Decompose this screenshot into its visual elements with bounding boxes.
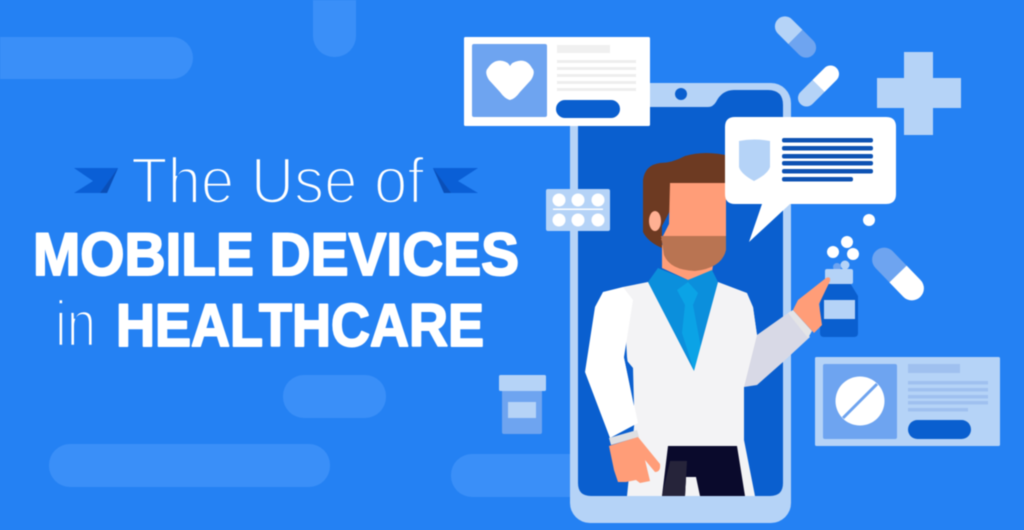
doctor: shirt — [648, 268, 718, 371]
doctor: ear — [649, 211, 661, 231]
doctor: coat — [623, 282, 757, 496]
button — [908, 420, 971, 439]
icon: capsule right — [867, 243, 929, 305]
doctor: neck — [662, 245, 716, 280]
doctor: raised arm — [744, 300, 810, 387]
icon: pill blister — [546, 189, 610, 231]
doctor: lowered hand — [609, 437, 660, 483]
icon: shield — [739, 140, 770, 181]
button — [556, 100, 620, 118]
doctor: left cuff — [609, 430, 639, 445]
icon: medicine jar — [499, 375, 546, 434]
card: heart — [464, 37, 650, 126]
icon: round tablet — [836, 376, 884, 426]
doctor: trouser shade — [662, 461, 687, 496]
doctor: face — [661, 183, 726, 240]
ribbon: left — [74, 168, 118, 193]
icon: capsule top — [771, 12, 820, 62]
doctor: tie — [677, 282, 702, 371]
doctor: trousers — [662, 446, 745, 496]
icon: medical cross — [877, 52, 961, 135]
icon: medicine bottle — [820, 260, 858, 337]
doctor: left sleeve — [585, 287, 638, 438]
doctor: pointing hand — [793, 277, 830, 333]
doctor — [585, 153, 810, 496]
icon: heart — [486, 61, 534, 100]
heading: HEALTHCARE: HEALTHCARE — [116, 292, 484, 359]
speech bubble — [725, 117, 896, 242]
heading: The Use of: The Use of — [131, 144, 425, 217]
title — [33, 144, 519, 360]
heading: in: in — [55, 287, 96, 360]
doctor: hair — [643, 153, 730, 248]
card: pill — [815, 357, 1000, 446]
heading: MOBILE DEVICES: MOBILE DEVICES — [33, 221, 519, 288]
ribbon: right — [433, 168, 478, 193]
doctor: raised arm cuff — [788, 310, 812, 338]
icon: floating pills — [827, 214, 875, 260]
icon: capsule middle — [794, 62, 843, 110]
doctor: gap under arm — [624, 357, 634, 406]
phone — [570, 83, 791, 523]
doctor: beard — [661, 236, 726, 271]
